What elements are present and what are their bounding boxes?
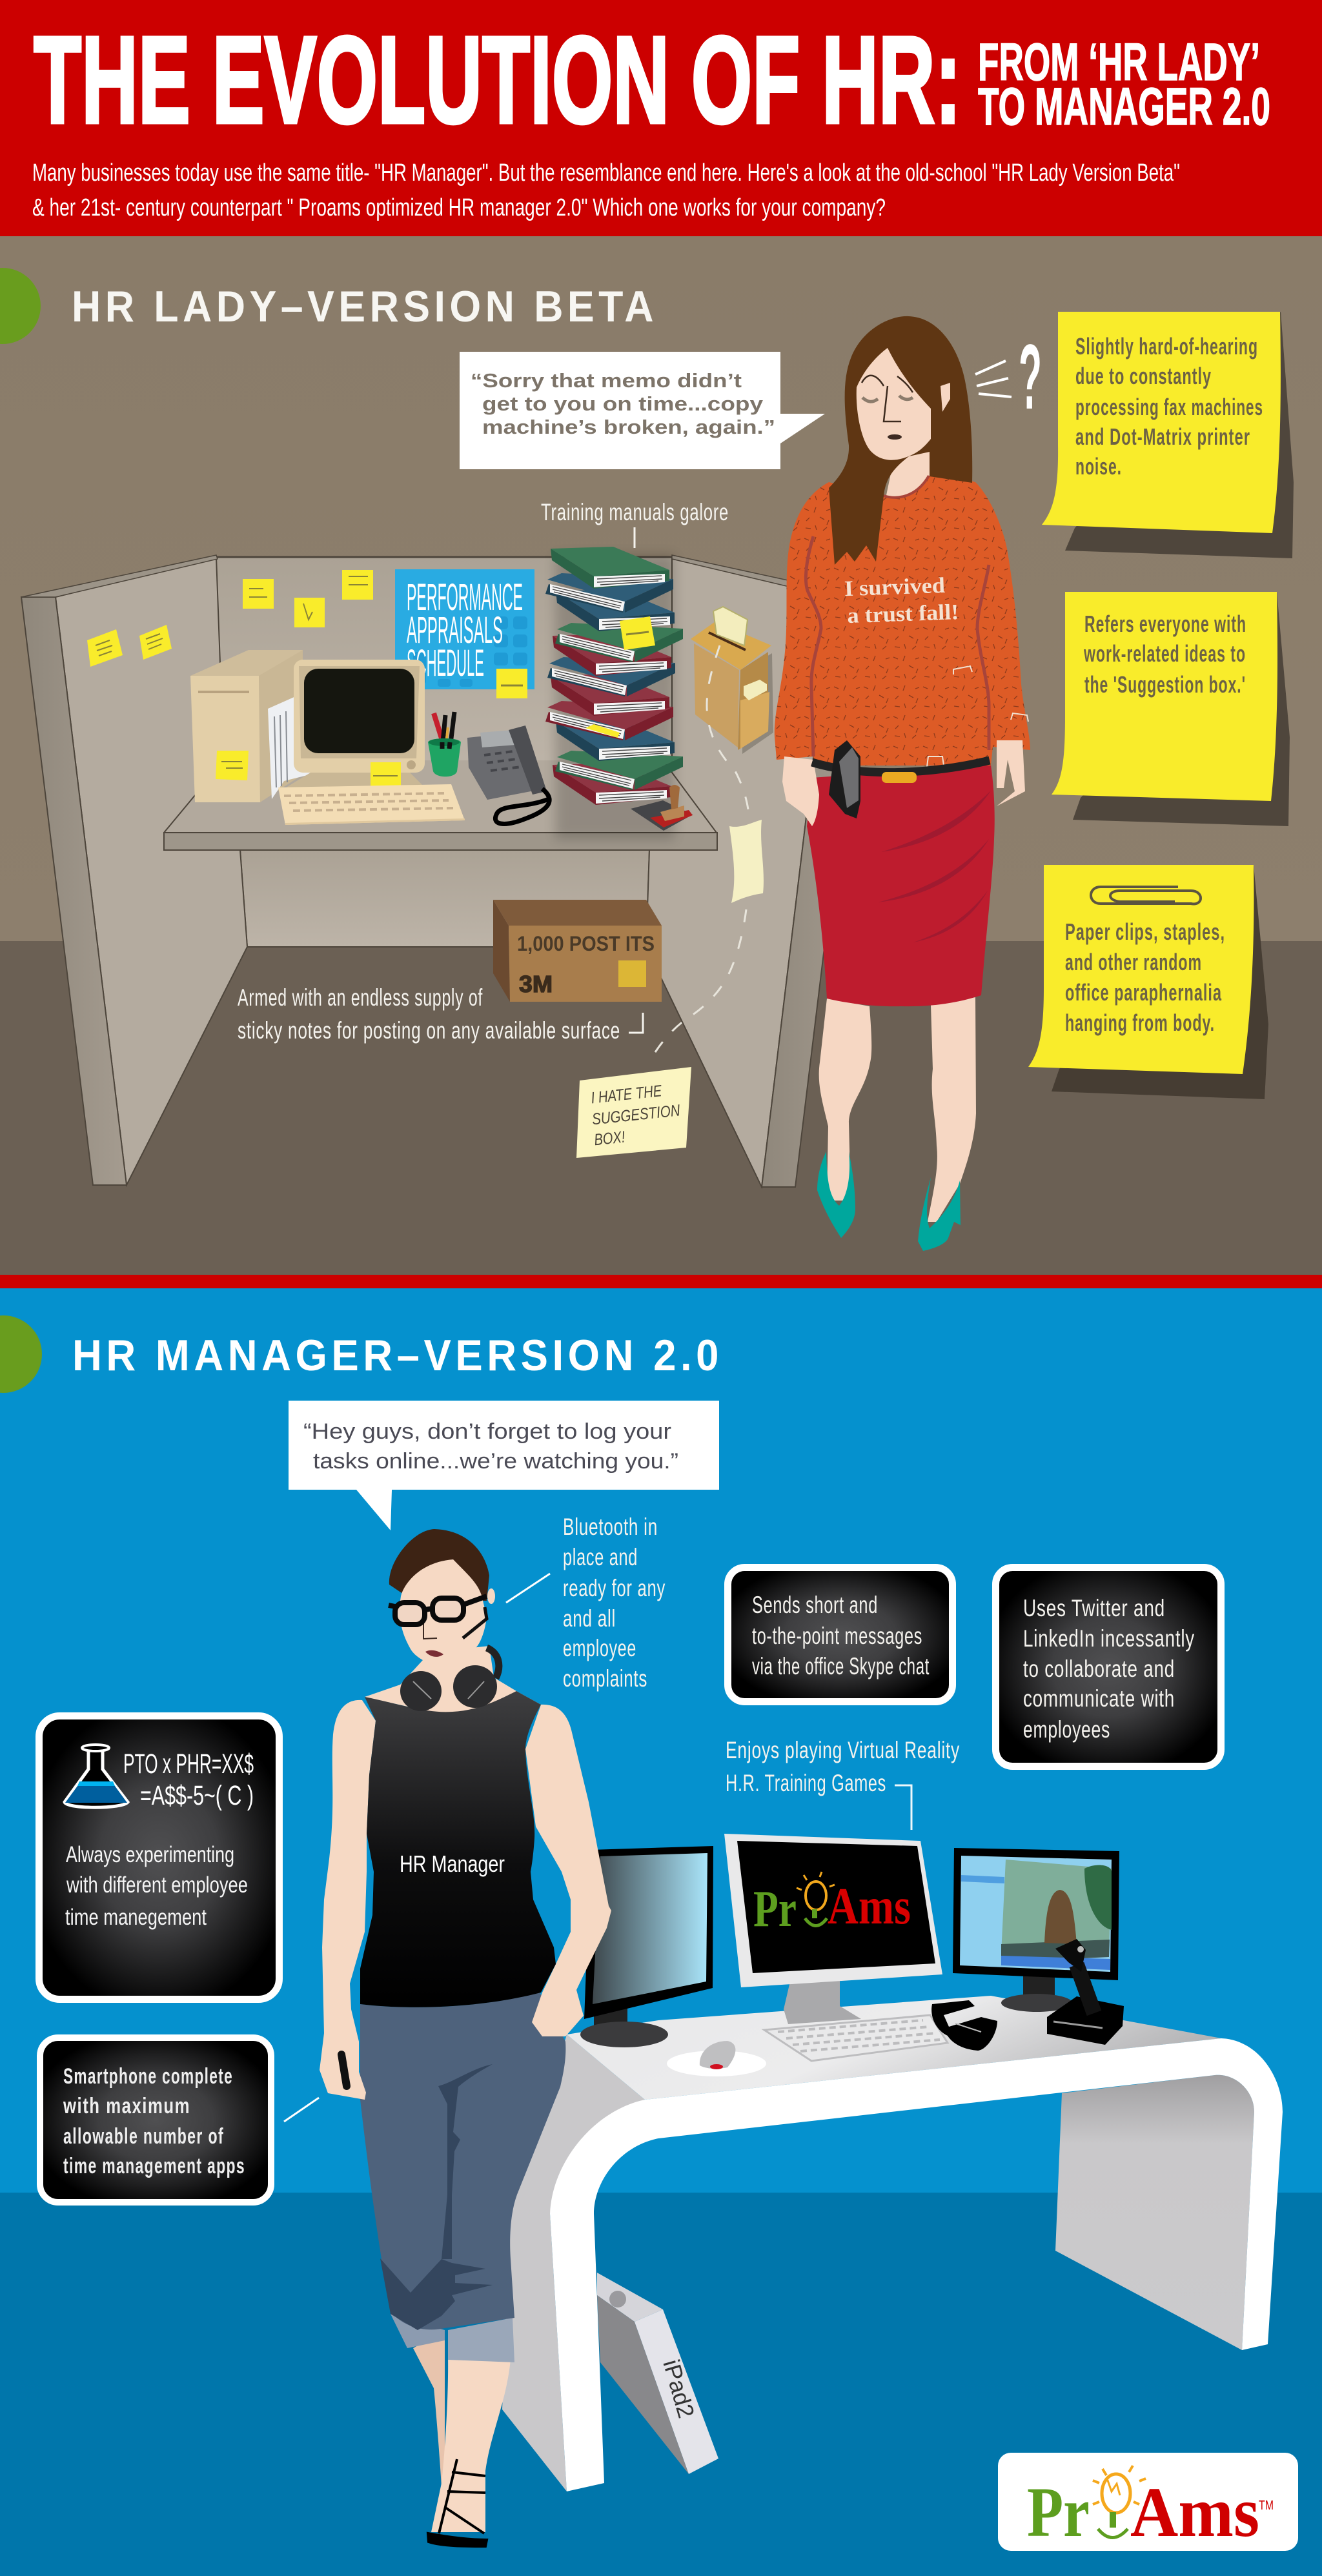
shoes — [817, 1151, 961, 1251]
caption: sticky notes supply: sticky notes for posting on any available surface — [238, 1017, 620, 1044]
card: experimenting: with different employee — [66, 1872, 248, 1898]
white keyboard — [764, 2015, 948, 2061]
white desk — [502, 1996, 1283, 2491]
logo on screen: Ams — [828, 1878, 911, 1935]
box of post-its: 1,000 POST ITS — [517, 932, 655, 955]
desk top — [567, 1996, 1221, 2100]
icon: light bulb — [1093, 2466, 1146, 2538]
badge circle — [0, 268, 41, 344]
speech bubble: HR lady: machine’s broken, again.” — [482, 416, 775, 438]
card: experimenting: PTO x PHR=XX$ — [123, 1749, 254, 1780]
front leg — [428, 2356, 511, 2546]
card: twitter and linkedin: to collaborate and — [1023, 1656, 1175, 1682]
smartphone in hand — [341, 2054, 347, 2086]
panel: HR lady section: ? — [1019, 326, 1042, 429]
sticky note: hard of hearing: noise. — [1075, 453, 1122, 480]
icon: flask — [65, 1745, 128, 1807]
papers behind monitor — [268, 696, 315, 799]
logo on screen — [753, 1872, 911, 1938]
wall and floor — [0, 236, 1322, 1275]
desk front band — [550, 2038, 1283, 2491]
caption: bluetooth: Bluetooth in — [563, 1514, 658, 1540]
card: twitter and linkedin: Uses Twitter and — [1023, 1595, 1165, 1621]
stack of training manuals — [545, 547, 683, 839]
card: twitter and linkedin — [995, 1567, 1221, 1766]
headphones — [400, 1648, 499, 1711]
note: I hate the suggestion box: I HATE THE — [590, 1082, 663, 1107]
sandal — [428, 2459, 487, 2546]
hair — [829, 316, 972, 565]
suggestion box — [691, 607, 773, 754]
sticky note: paper clips: Paper clips, staples, — [1065, 918, 1225, 945]
left wall — [21, 555, 247, 1185]
card: twitter and linkedin: communicate with — [1023, 1685, 1175, 1712]
intro text — [32, 159, 1180, 221]
ProAms logo — [998, 2453, 1298, 2551]
card: twitter and linkedin: employees — [1023, 1716, 1110, 1743]
rubber stamp — [631, 785, 693, 831]
glasses — [389, 1596, 487, 1625]
skirt — [807, 765, 995, 1006]
desk — [164, 760, 717, 850]
old CRT monitor — [284, 660, 426, 789]
poster: performance appraisals schedule: SCHEDULE — [407, 642, 484, 684]
caption: bluetooth: ready for any — [563, 1575, 666, 1601]
right desk leg — [1055, 2075, 1254, 2350]
right video monitor — [953, 1848, 1119, 2012]
card: skype: via the office Skype chat — [752, 1653, 930, 1679]
caption: sticky notes supply: Armed with an endless supply of — [238, 984, 483, 1011]
sticky note: paper clips — [1028, 865, 1268, 1099]
back leg — [413, 2330, 445, 2487]
face — [857, 348, 950, 460]
card: experimenting — [39, 1716, 279, 2000]
card: smartphone — [40, 2038, 319, 2202]
left desk side — [502, 2034, 645, 2491]
black top — [360, 1691, 556, 2007]
speech bubble: manager — [289, 1401, 719, 1530]
mouse and pad — [667, 2041, 766, 2076]
panel: HR manager section — [0, 1288, 1322, 2576]
legs — [819, 997, 976, 1222]
computer tower — [190, 650, 303, 802]
card: experimenting: time manegement — [65, 1905, 207, 1930]
badge circle — [0, 1315, 42, 1393]
card: experimenting: =A$$-5~( C ) — [140, 1780, 254, 1811]
caption: bluetooth: employee — [563, 1635, 636, 1661]
caption: VR training games — [726, 1737, 960, 1830]
trousers — [360, 1993, 565, 2362]
caption: bluetooth: place and — [563, 1544, 638, 1570]
right hand — [997, 740, 1025, 806]
wall and floor — [0, 1288, 1322, 2576]
black top: HR Manager — [400, 1851, 505, 1877]
sweater — [775, 476, 1030, 767]
caption: bluetooth — [506, 1514, 666, 1692]
note: I hate the suggestion box: SUGGESTION — [591, 1101, 682, 1129]
logo on screen: Pr — [753, 1881, 797, 1938]
caption: sticky notes supply — [238, 984, 643, 1044]
card: smartphone: allowable number of — [63, 2124, 224, 2149]
subtitle — [978, 33, 1270, 136]
heading: HR MANAGER–VERSION 2.0 — [72, 1331, 723, 1380]
caption: training manuals: Training manuals galore — [541, 499, 729, 525]
stapler — [829, 740, 860, 818]
left desktop monitor — [580, 1846, 713, 2047]
sticky notes on wall — [87, 570, 373, 667]
character: HR lady — [775, 316, 1042, 1251]
joystick — [1047, 1939, 1124, 2045]
speech bubble: manager: tasks online...we’re watching you.” — [313, 1449, 678, 1474]
caption: bluetooth: complaints — [563, 1665, 647, 1692]
neck and shoulders — [365, 1646, 541, 1717]
sticky note: hard of hearing: due to constantly — [1075, 363, 1212, 389]
icon: paper clip — [1091, 887, 1201, 904]
keyboard — [278, 784, 465, 825]
sticky note: hard of hearing — [1042, 312, 1294, 558]
right wall — [646, 555, 867, 1187]
note: I hate the suggestion box — [576, 1067, 691, 1158]
card: smartphone: time management apps — [63, 2154, 245, 2178]
iPad box — [597, 2273, 718, 2474]
dashed paper trail — [649, 645, 749, 1064]
ProAms logo: Ams — [1130, 2473, 1259, 2551]
bluetooth headset — [463, 1607, 487, 1638]
speech bubble: HR lady: get to you on time...copy — [482, 392, 764, 415]
sweater slogan: I survived — [844, 574, 946, 601]
box of post-its — [493, 900, 662, 1002]
right arm — [525, 1705, 611, 2036]
speech bubble: HR lady: “Sorry that memo didn’t — [471, 369, 742, 392]
box of post-its: 3M — [519, 971, 553, 997]
intro text: & her 21st- century counterpart " Proams optimized HR manager 2.0" Which one works for your company? — [32, 194, 886, 221]
left arm — [320, 1700, 376, 2100]
poster: performance appraisals schedule: APPRAISALS — [407, 609, 503, 651]
heading: HR LADY–VERSION BETA — [72, 282, 658, 331]
card: skype: Sends short and — [752, 1592, 878, 1618]
divider band — [0, 1275, 1322, 1288]
telephone — [467, 725, 549, 824]
card: skype — [728, 1567, 953, 1701]
card: smartphone: with maximum — [63, 2094, 190, 2118]
sticky note: paper clips: office paraphernalia — [1065, 979, 1222, 1006]
panel: HR lady section — [0, 236, 1322, 1275]
cubicle: PERFORMANCE — [407, 576, 523, 618]
card: twitter and linkedin: LinkedIn incessantly — [1023, 1625, 1195, 1652]
sticky note: paper clips: and other random — [1065, 949, 1202, 975]
sticky note: paper clips: hanging from body. — [1065, 1009, 1215, 1036]
sticky note: suggestion box — [1052, 592, 1290, 826]
note: I hate the suggestion box: BOX! — [593, 1128, 626, 1149]
belt — [812, 760, 990, 783]
VR goggles — [931, 2000, 997, 2051]
face — [389, 1559, 495, 1667]
cubicle — [21, 547, 867, 1187]
caption: bluetooth: and all — [563, 1605, 616, 1632]
card: smartphone: Smartphone complete — [63, 2064, 233, 2089]
card: skype: to-the-point messages — [752, 1623, 922, 1649]
ProAms logo: TM — [1259, 2499, 1274, 2513]
card: experimenting: Always experimenting — [66, 1842, 234, 1867]
iPad box: iPad2 — [658, 2357, 700, 2421]
sweater slogan: a trust fall! — [847, 600, 959, 628]
speech bubble: HR lady — [460, 352, 825, 469]
left hand — [782, 756, 819, 826]
ProAms logo: Pr — [1027, 2473, 1090, 2551]
back wall — [216, 557, 673, 947]
main monitor with logo — [724, 1834, 942, 2024]
caption: VR training games: H.R. Training Games — [726, 1770, 886, 1796]
poster: performance appraisals schedule — [395, 569, 534, 698]
caption: VR training games: Enjoys playing Virtual Reality — [726, 1737, 960, 1763]
confused question mark — [975, 326, 1042, 429]
header banner — [0, 0, 1322, 236]
pen cup — [428, 712, 461, 776]
neck — [886, 445, 930, 500]
character: HR manager — [320, 1529, 611, 2546]
speech bubble: manager: “Hey guys, don’t forget to log your — [303, 1419, 671, 1444]
sweater slogan — [844, 573, 959, 628]
falling paper — [729, 820, 764, 903]
hair — [389, 1529, 489, 1601]
